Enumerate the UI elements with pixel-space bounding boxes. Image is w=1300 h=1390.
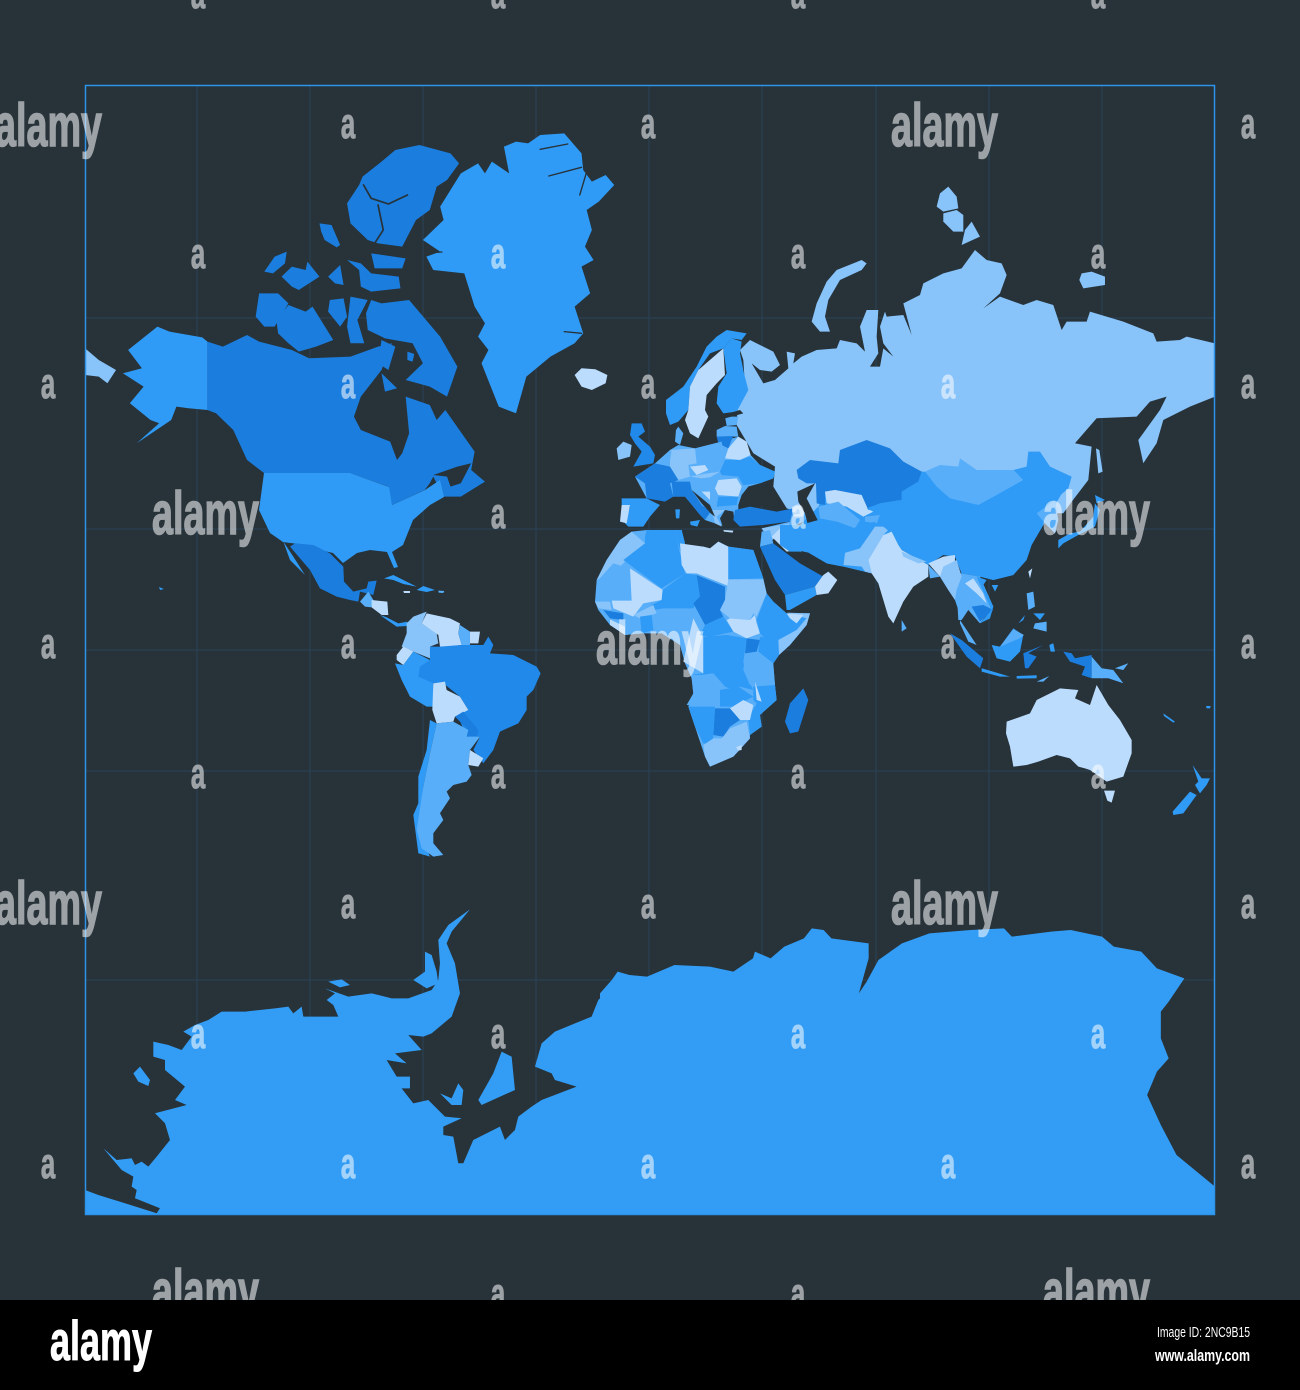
central Europe base: [635, 437, 775, 527]
Tunisia: [675, 530, 685, 550]
South Sudan: [727, 615, 760, 638]
Romania: [715, 478, 742, 497]
continent: North America: [85, 133, 614, 505]
Lesser Sunda Islands: [1017, 675, 1037, 679]
Liberia: [610, 619, 625, 635]
Lithuania: [717, 436, 733, 448]
Crete: [723, 530, 733, 533]
Jamaica: [403, 591, 410, 593]
Novaya Zemlya: [812, 260, 867, 332]
watermark pattern: alamy: [596, 610, 703, 677]
continent: Africa and Arabia: [595, 530, 837, 767]
Halmahera: [1049, 643, 1055, 652]
watermark pattern: a: [1241, 879, 1255, 928]
Tanzania: [743, 653, 775, 687]
Middle East base: [762, 505, 823, 553]
watermark pattern: a: [1091, 1009, 1105, 1058]
Sicily: [690, 520, 700, 527]
South Africa: [703, 722, 750, 767]
watermark pattern: a: [791, 749, 805, 798]
Pakistan: [843, 527, 892, 573]
Afghanistan: [840, 522, 877, 553]
DR Congo: [690, 635, 753, 690]
watermark pattern: a: [191, 229, 205, 278]
watermark pattern: a: [491, 229, 505, 278]
watermark pattern: a: [41, 359, 55, 408]
Turkmenistan: [818, 502, 860, 528]
watermark pattern: a: [491, 489, 505, 538]
watermark pattern: alamy: [0, 870, 102, 937]
Namibia: [688, 707, 715, 745]
watermark pattern: a: [1241, 359, 1255, 408]
watermark pattern: a: [1091, 229, 1105, 278]
Greenland: [423, 133, 614, 413]
Kazakhstan: [797, 440, 922, 508]
map frame: [86, 86, 1214, 1214]
Turkey: [733, 507, 793, 527]
watermark pattern: a: [1091, 749, 1105, 798]
country: United States: [259, 473, 444, 568]
Ghana: [640, 615, 653, 633]
Bathurst Island: [328, 265, 344, 285]
Cameroon and Gabon: [683, 618, 703, 673]
Spain: [622, 498, 660, 527]
website: www.alamy.com: [1154, 1346, 1250, 1365]
Portugal: [620, 505, 630, 523]
Nepal: [902, 552, 927, 563]
Kyrgyzstan: [867, 500, 900, 513]
Axel Heiberg fragment: [319, 223, 340, 247]
Tasmania: [1104, 791, 1115, 803]
watermark pattern: a: [641, 99, 655, 148]
watermark pattern: a: [641, 879, 655, 928]
Oceania: [1006, 685, 1211, 815]
Severnaya Zemlya: [937, 187, 980, 245]
Ivory Coast: [625, 618, 642, 635]
Hainan: [992, 585, 998, 592]
Timor: [1037, 676, 1049, 682]
Egypt: [728, 547, 763, 579]
Taiwan: [1028, 568, 1032, 578]
Black Sea: [738, 482, 780, 507]
Adriatic Sea: [692, 490, 715, 517]
Kenya: [758, 637, 779, 663]
Malay Peninsula: [960, 620, 977, 645]
watermark pattern: a: [341, 619, 355, 668]
France: [635, 463, 678, 502]
watermark pattern: a: [41, 619, 55, 668]
Korea: [1037, 500, 1058, 533]
Malawi: [755, 682, 762, 702]
footer bar: [0, 1300, 1300, 1390]
Bolivia: [432, 682, 468, 723]
watermark pattern: a: [1241, 1139, 1255, 1188]
Myanmar: [940, 560, 962, 600]
Sulawesi: [1023, 645, 1043, 668]
Sardinia: [675, 509, 680, 518]
Gulf of Finland: [723, 410, 743, 418]
watermark pattern: a: [341, 99, 355, 148]
Argentina: [417, 722, 480, 857]
Ireland: [617, 442, 632, 460]
Sudan: [720, 579, 767, 620]
watermark pattern: a: [191, 749, 205, 798]
Victoria Island: [276, 305, 333, 352]
Northeast India: [928, 555, 955, 577]
New Caledonia: [1163, 713, 1175, 723]
Benelux: [658, 450, 672, 470]
Guinea: [603, 610, 623, 620]
Luzon: [1027, 592, 1035, 610]
India: [868, 532, 928, 623]
watermark pattern: a: [191, 1009, 205, 1058]
Colombia: [402, 612, 438, 658]
Hokkaido: [1095, 495, 1105, 503]
Levant: [762, 523, 790, 542]
Brazil: [418, 637, 541, 763]
Belarus: [725, 437, 751, 460]
Botswana: [713, 708, 740, 737]
Hispaniola: [417, 586, 435, 592]
watermark pattern: a: [41, 1139, 55, 1188]
continent: Europe: [617, 330, 823, 553]
watermark pattern: a: [491, 1269, 505, 1318]
Czechia: [690, 465, 708, 475]
Sumatra: [950, 633, 983, 668]
watermark pattern: alamy: [0, 92, 102, 159]
watermark pattern: a: [341, 359, 355, 408]
watermark pattern: a: [791, 1269, 805, 1318]
Suriname: [470, 632, 480, 643]
Chukotka tip of Russia: [85, 348, 116, 383]
Uzbekistan: [825, 490, 877, 517]
Ukraine: [720, 457, 775, 485]
Sri Lanka: [902, 620, 907, 632]
Aegean Sea: [720, 510, 735, 528]
map graticule: [85, 85, 1215, 1215]
Caspian Sea: [797, 483, 819, 527]
Ecuador: [397, 647, 413, 665]
New Zealand North Island: [1193, 765, 1210, 793]
Persian Gulf: [801, 551, 827, 568]
Greenland fjords: [430, 144, 587, 333]
Angola: [687, 673, 725, 707]
Southampton Island: [382, 373, 397, 392]
watermark pattern: a: [791, 489, 805, 538]
Morocco and Western Sahara: [597, 532, 645, 580]
Malaysian Borneo: [1000, 629, 1024, 647]
Banks Island: [256, 293, 288, 327]
Canada mainland: [207, 335, 485, 505]
continent: Central and South America: [283, 542, 541, 857]
watermark pattern: a: [941, 359, 955, 408]
image ID: Image ID: 2NC9B15: [1157, 1324, 1250, 1341]
Cuba: [384, 575, 417, 587]
Tajikistan: [865, 515, 880, 523]
watermark pattern: a: [491, 1009, 505, 1058]
Norway: [666, 330, 747, 425]
Bangladesh: [928, 565, 940, 578]
Honduras and Nicaragua: [372, 600, 388, 615]
Russian mainland: [737, 250, 1215, 513]
Uruguay: [468, 750, 483, 767]
United Kingdom: [630, 423, 655, 467]
Jordan: [760, 530, 773, 547]
Borneo: [992, 628, 1023, 662]
Vietnam: [977, 577, 993, 623]
Caucasus: [792, 505, 807, 517]
Hungary: [702, 477, 718, 488]
Cambodia: [972, 605, 993, 622]
Sakhalin: [1096, 448, 1103, 473]
Western Balkans: [692, 488, 718, 510]
footer logo: alamy: [50, 1309, 152, 1372]
Mali: [612, 568, 663, 617]
Fiji: [1206, 706, 1211, 708]
Niger: [652, 573, 700, 610]
Finland: [717, 338, 748, 413]
continent: Asia: [780, 440, 1128, 683]
Antarctic islands: [133, 952, 515, 1105]
watermark pattern: alamy: [1043, 480, 1150, 547]
Australia: [1006, 685, 1132, 782]
Mindanao: [1033, 622, 1047, 632]
Somalia: [778, 613, 810, 655]
Visayas: [1033, 613, 1045, 620]
Iceland: [575, 368, 607, 390]
watermark pattern: a: [641, 359, 655, 408]
New Zealand South Island: [1173, 792, 1197, 815]
Somaliland: [787, 613, 803, 623]
Thailand: [957, 585, 983, 620]
Foxe Basin island: [407, 352, 414, 362]
Bulgaria: [717, 497, 738, 507]
Mongolia: [925, 458, 1023, 505]
Iraq: [772, 525, 800, 552]
Devon Island: [371, 253, 406, 268]
watermark pattern: alamy: [891, 92, 998, 159]
Gulf of Saint Lawrence: [433, 463, 471, 487]
watermark pattern: a: [341, 1139, 355, 1188]
China: [882, 452, 1072, 580]
Antarctica: [85, 909, 1215, 1215]
Peru: [395, 652, 433, 707]
Chile: [413, 720, 437, 857]
Greece: [712, 510, 725, 527]
Costa Rica and Panama: [380, 615, 407, 627]
Guyana: [458, 625, 470, 645]
Sweden: [685, 348, 725, 438]
watermark pattern: a: [791, 1009, 805, 1058]
Prince of Wales Island: [328, 298, 347, 327]
watermark pattern: a: [491, 749, 505, 798]
Saudi Arabia: [760, 543, 823, 595]
Denmark: [675, 427, 683, 445]
Madagascar: [785, 688, 808, 733]
watermark pattern: alamy: [152, 1258, 259, 1325]
Yemen: [785, 587, 817, 610]
Puerto Rico: [438, 591, 444, 593]
Central African Republic: [700, 617, 733, 637]
Zambia: [720, 687, 753, 707]
Somerset Island: [347, 297, 368, 343]
watermark pattern: alamy: [1043, 1258, 1150, 1325]
East Antarctica: [600, 928, 1215, 1215]
Alaska: [123, 327, 207, 443]
Mexico: [290, 543, 377, 602]
New Britain: [1115, 663, 1128, 670]
Java: [982, 668, 1010, 677]
watermark pattern: a: [641, 1139, 655, 1188]
Estonia: [725, 417, 738, 426]
Melville Island: [282, 262, 319, 290]
Japan: [1058, 503, 1100, 548]
Algeria: [623, 530, 685, 588]
Nigeria: [658, 608, 697, 645]
Poland: [695, 442, 725, 472]
watermark pattern: a: [791, 229, 805, 278]
watermark pattern: a: [341, 879, 355, 928]
Austria and Slovakia: [690, 472, 720, 478]
Senegal: [595, 602, 612, 610]
Prince Patrick Island: [264, 252, 287, 273]
Ellesmere Island: [347, 145, 459, 247]
Mozambique: [748, 685, 777, 735]
Zimbabwe: [730, 700, 753, 720]
Lesotho: [736, 745, 742, 751]
watermark pattern: a: [941, 1139, 955, 1188]
Cornwallis and Bathurst: [347, 260, 400, 292]
Papua New Guinea: [1092, 657, 1123, 683]
watermark pattern: alamy: [152, 480, 259, 547]
Italy: [672, 482, 711, 520]
West Papua: [1063, 652, 1092, 678]
Venezuela: [422, 613, 462, 647]
Palawan: [1018, 615, 1025, 623]
watermark pattern: a: [1241, 99, 1255, 148]
Chad: [693, 575, 725, 625]
Ethiopia: [757, 593, 810, 643]
Boothia Peninsula: [378, 340, 395, 370]
watermark pattern: a: [1241, 619, 1255, 668]
Iran: [793, 520, 855, 567]
Hawaii: [159, 587, 164, 590]
Oman: [815, 572, 837, 595]
Latvia: [717, 426, 738, 437]
Ellesmere fjords: [364, 185, 407, 243]
Burkina Faso: [633, 605, 657, 618]
Baffin Island: [366, 300, 457, 397]
Indochina base: [940, 573, 993, 623]
country: Russia: [737, 187, 1215, 513]
Serbia: [702, 492, 710, 500]
Asia base: [780, 472, 1072, 580]
Germany: [670, 448, 697, 480]
watermark pattern: a: [941, 619, 955, 668]
New Siberian Islands: [1079, 272, 1105, 288]
Laos: [965, 578, 987, 603]
West Antarctica: [85, 909, 605, 1215]
Baja California: [283, 542, 305, 575]
Paraguay: [455, 712, 478, 738]
Uganda: [745, 638, 760, 653]
watermark pattern: alamy: [891, 870, 998, 937]
Guatemala and Belize: [360, 592, 373, 607]
Africa base: [595, 530, 810, 767]
Libya: [680, 542, 728, 586]
Mauritania: [598, 563, 632, 600]
